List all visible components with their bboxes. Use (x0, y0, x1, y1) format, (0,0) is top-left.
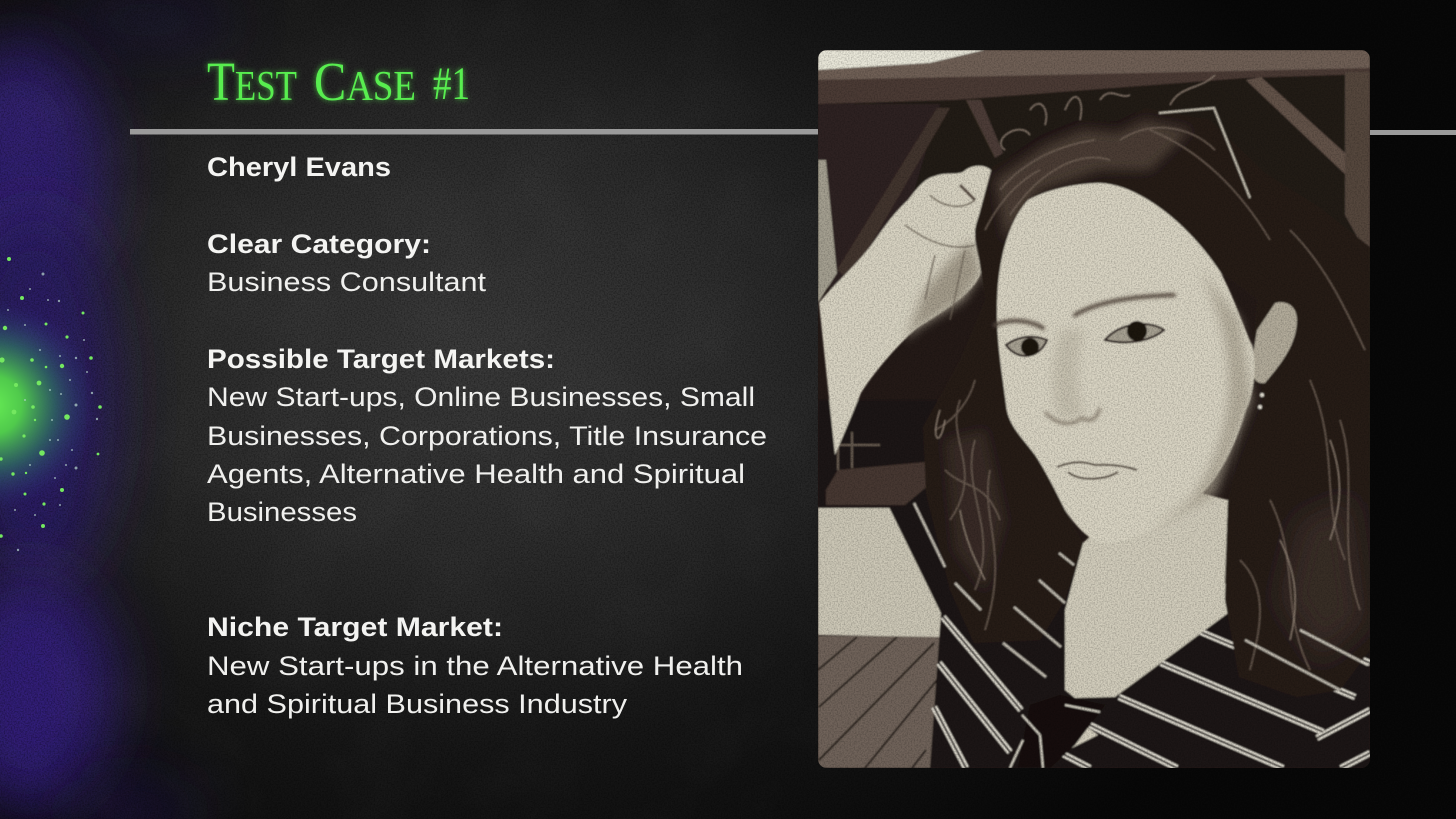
photo: stripes through hair (914, 503, 1368, 690)
title: CASE (314, 51, 416, 112)
text block: possible target markets: Businesses (207, 497, 357, 527)
nebula: purple haze on left edge (0, 0, 240, 819)
text block: clear category (207, 229, 487, 297)
text block: niche target market: and Spiritual Business Industry (207, 689, 628, 719)
title: TEST (207, 51, 297, 112)
photo: nose (1045, 408, 1100, 423)
photo: lower arm (818, 508, 941, 637)
photo: mouth (1057, 462, 1137, 479)
text block: name: Cheryl Evans (207, 152, 391, 182)
text block: possible target markets (207, 344, 767, 527)
text block: possible target markets: Possible Target Markets: (207, 344, 555, 374)
divider rule (130, 129, 1456, 135)
title (207, 51, 470, 112)
text block: possible target markets: Agents, Alternative Health and Spiritual (207, 459, 745, 489)
text block: possible target markets: New Start-ups, Online Businesses, Small (207, 382, 755, 412)
photo: hair (923, 75, 1370, 697)
photo: sky (818, 50, 985, 70)
photo: sepia portrait (818, 50, 1370, 768)
title: #1 (433, 58, 470, 110)
photo: chair in shadow (818, 399, 936, 509)
photo: gazebo roof (818, 50, 1370, 303)
text block: clear category: Clear Category: (207, 229, 431, 259)
text block: clear category: Business Consultant (207, 267, 487, 297)
text block: niche target market (207, 612, 743, 719)
photo: film grain (818, 50, 1370, 768)
photo: eyebrows (995, 295, 1174, 328)
nebula: stars (0, 257, 102, 551)
photo: face (995, 183, 1254, 543)
photo: striped shirt (889, 500, 1370, 768)
photo: wooden deck (818, 636, 945, 768)
photo: ear and earring (1252, 302, 1297, 409)
photo: neckline tie (1010, 695, 1105, 768)
nebula: green glow (0, 290, 110, 520)
text block: niche target market: New Start-ups in the Alternative Health (207, 651, 743, 681)
text block: possible target markets: Businesses, Corporations, Title Insurance (207, 421, 767, 451)
text block: niche target market: Niche Target Market: (207, 612, 503, 642)
photo: neck (1064, 493, 1230, 700)
photo: raised hand and arm (819, 166, 994, 455)
photo: eyes (1006, 321, 1164, 356)
photo: glasses on head (1159, 108, 1250, 198)
